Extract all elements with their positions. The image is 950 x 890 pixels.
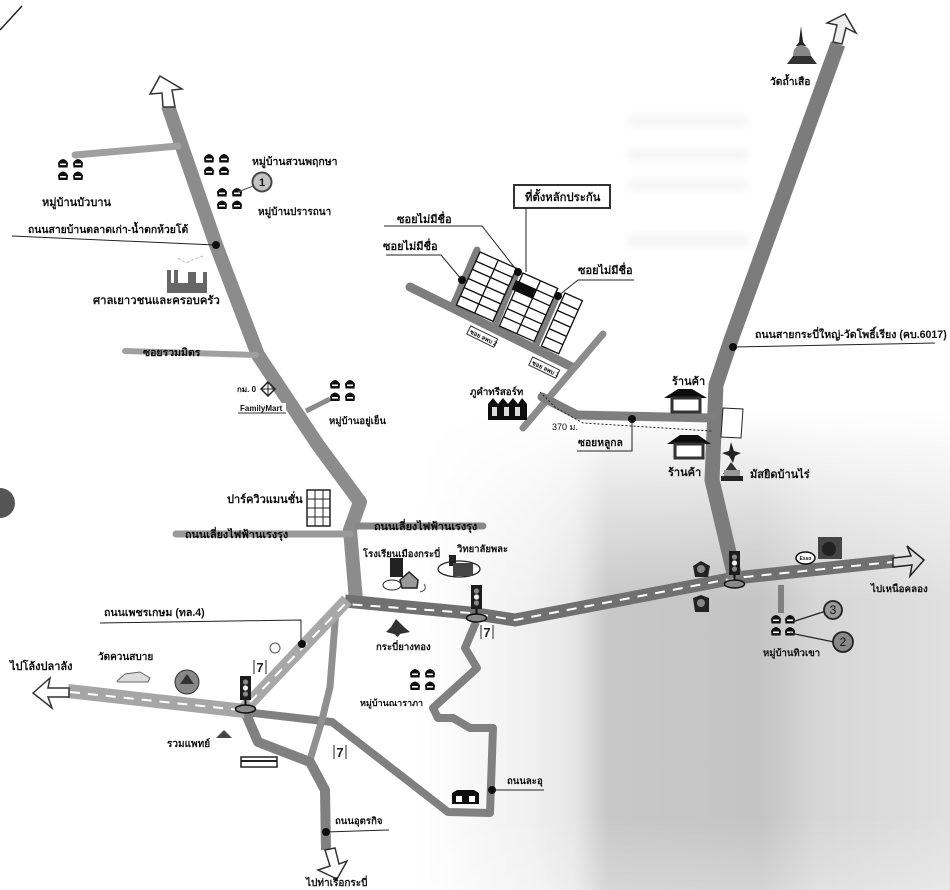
icon: small sign — [270, 643, 280, 653]
shields on highway — [693, 561, 710, 612]
arrow north west — [150, 76, 182, 107]
arrow west — [33, 678, 69, 708]
callout: collateral location — [514, 185, 610, 272]
label: to Ao Luek: ไปโล้งปลาลัง — [8, 659, 73, 673]
shop north — [664, 375, 707, 412]
road network: eastern main road — [712, 44, 838, 578]
callout: Ban Talat Kao road: ถนนสายบ้านตลาดเก่า-น้ำตกห้วยโต้ — [28, 221, 188, 236]
callout: Uttarakit road: ถนนอุตรกิจ — [335, 816, 383, 827]
village: Narapha: หมู่บ้านณาราภา — [360, 698, 423, 709]
callout: Krabi Yai road: ถนนสายกระบี่ใหญ่-วัดโพธิ์เรียง (คบ.6017) — [755, 326, 947, 341]
landmark icon: shrine near road — [452, 790, 479, 804]
shop north: ร้านค้า — [672, 375, 705, 388]
punch hole — [0, 488, 15, 518]
building: Park View Mansion — [227, 490, 330, 526]
callout: unnamed soi A: ซอยไม่มีชื่อ — [397, 211, 452, 226]
landmark: Krabi Yang Thong: กระบี่ยางทอง — [376, 639, 431, 653]
label: 370 m: 370 ม. — [552, 422, 578, 432]
mosque — [721, 442, 810, 481]
temple: Wat Tham Suea: วัดถ้ำเสือ — [770, 73, 810, 88]
arrow south — [318, 848, 347, 879]
traffic light: east junction — [724, 551, 744, 588]
village: Thio Khao with markers — [763, 601, 853, 660]
FamilyMart and km marker: กม. 0 — [237, 385, 257, 394]
callout: Phetkasem road: ถนนเพชรเกษม (ทล.4) — [104, 607, 205, 619]
callout: unnamed soi C: ซอยไม่มีชื่อ — [578, 262, 633, 277]
college: physical education — [438, 544, 508, 577]
callout: Phetkasem road — [100, 607, 306, 648]
arrow north east — [827, 14, 856, 44]
resort: townhouses — [470, 386, 527, 420]
FamilyMart and km marker: FamilyMart — [240, 404, 283, 413]
temple: Wat Tham Suea — [770, 26, 817, 88]
village: Yu Yen — [329, 380, 386, 428]
label and icon: Wat Khuan Sabai: วัดควนสบาย — [98, 651, 153, 663]
callout: collateral location: ที่ตั้งหลักประกัน — [525, 188, 601, 204]
icon: 7-Eleven west — [253, 660, 267, 675]
callout: unnamed soi B — [383, 238, 466, 284]
village: Bua Ban — [42, 159, 111, 210]
label: to Nuea Khlong: ไปเหนือคลอง — [870, 582, 928, 595]
school: Mueang Krabi — [362, 546, 440, 592]
callout: unnamed soi A — [384, 211, 522, 276]
callout: Soi Luk Kon — [577, 415, 636, 451]
village: Thio Khao with markers: 2 — [840, 635, 847, 649]
callout: Soi Luk Kon: ซอยหลูกล — [578, 438, 623, 450]
callout: Uttarakit road — [322, 816, 389, 836]
soi sign 1: ซอย ลพบ 1 — [531, 360, 561, 379]
village: Yu Yen: หมู่บ้านอยู่เย็น — [329, 414, 386, 428]
icon: 7-Eleven college — [480, 625, 494, 640]
village: Suan Phruksa: หมู่บ้านสวนพฤกษา — [252, 155, 338, 169]
land plots — [456, 252, 582, 354]
village: Thio Khao with markers: 3 — [830, 603, 837, 617]
building: Park View Mansion: ปาร์ควิวแมนชั่น — [227, 491, 303, 506]
village: Thio Khao with markers: หมู่บ้านทิวเขา — [763, 647, 820, 660]
village: Suan Phruksa — [204, 154, 338, 175]
label: Soi Ruam Mit: ซอยรวมมิตร — [143, 347, 201, 359]
label: bypass road east: ถนนเลี่ยงไฟฟ้านเรงรุง — [374, 518, 477, 534]
callout: unnamed soi C — [554, 262, 634, 300]
page corner mark — [0, 6, 22, 30]
traffic light: west junction — [236, 676, 256, 713]
dotted route to the property — [540, 392, 712, 431]
logos east road: Esso — [800, 556, 811, 562]
callout: unnamed soi B: ซอยไม่มีชื่อ — [383, 238, 438, 253]
marker 1 — [238, 172, 272, 192]
arrow east — [893, 546, 924, 576]
marker 1: 1 — [259, 177, 265, 189]
landmark: Krabi Yang Thong — [376, 619, 431, 653]
logos east road — [796, 537, 842, 564]
mosque: มัสยิดบ้านไร่ — [750, 467, 810, 481]
shop south: ร้านค้า — [668, 466, 701, 479]
hospital: Ruam Phaet — [167, 730, 277, 767]
village: Prathana — [217, 188, 331, 219]
road network: Phetkasem highway with dashes — [68, 561, 895, 711]
icon: round seal — [175, 670, 199, 694]
hospital: Ruam Phaet: รวมแพทย์ — [167, 738, 210, 750]
road network: estate access roads — [410, 250, 712, 428]
label: bypass road west: ถนนเลี่ยงไฟฟ้านเรงรุง — [185, 526, 288, 542]
icon and label: juvenile and family court — [93, 256, 220, 307]
icon and label: juvenile and family court: ศาลเยาวชนและครอบครัว — [93, 294, 220, 307]
road network: north-west main road — [75, 106, 483, 600]
village: Prathana: หมู่บ้านปรารถนา — [258, 206, 331, 219]
village: Narapha — [360, 669, 435, 709]
traffic light: college junction — [466, 585, 486, 622]
soi sign 2: ซอย ลพบ 2 — [469, 329, 499, 348]
resort: townhouses: ภูคำทรีสอร์ท — [470, 386, 523, 399]
shop south — [667, 435, 711, 479]
college: physical education: วิทยาลัยพละ — [456, 544, 508, 555]
callout: Ban Talat Kao road — [12, 221, 220, 249]
label and icon: Wat Khuan Sabai — [98, 651, 153, 682]
background with scanned shadow — [479, 436, 950, 890]
callout: Krabi Yai road — [729, 326, 947, 351]
road network: southern local roads — [245, 585, 781, 850]
village: Bua Ban: หมู่บ้านบัวบาน — [42, 196, 111, 210]
faint ghost print in top right — [628, 116, 748, 247]
FamilyMart and km marker — [237, 382, 286, 414]
callout: Ao Nang road — [488, 776, 544, 794]
label: to Krabi pier: ไปท่าเรือกระบี่ — [305, 875, 368, 889]
icon: 7-Eleven south — [333, 745, 347, 760]
callout: Ao Nang road: ถนนละอุ — [507, 776, 543, 787]
land block by junction — [721, 408, 743, 438]
school: Mueang Krabi: โรงเรียนเมืองกระบี่ — [362, 546, 440, 560]
